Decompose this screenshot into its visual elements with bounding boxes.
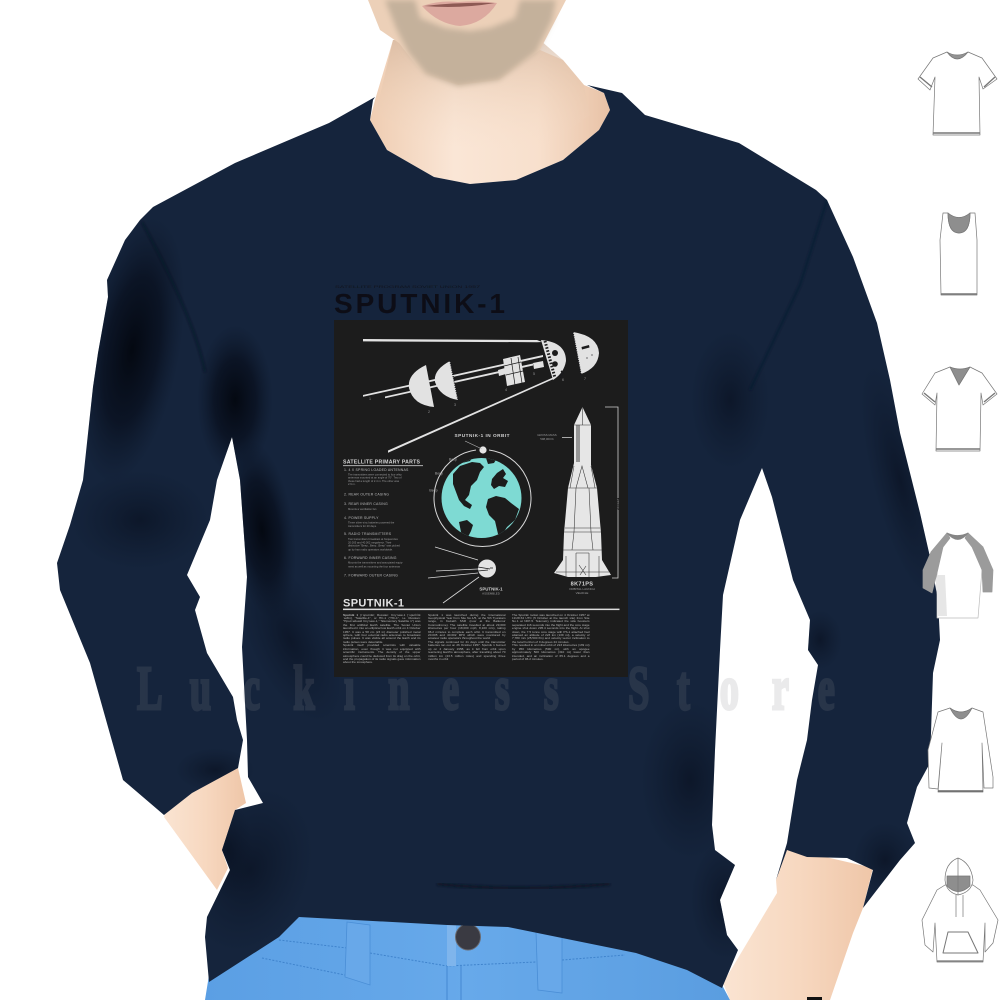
left forearm — [164, 768, 246, 890]
forward outer casing — [573, 332, 599, 374]
orbit heading: SPUTNIK-1 IN ORBIT — [454, 433, 510, 438]
belt loop left — [345, 922, 370, 985]
thumbnail: long sleeve tee — [928, 708, 993, 792]
watermark: Luckiness Store — [137, 655, 835, 723]
satellite primary parts list: The transmitters were connected to four whip — [348, 472, 402, 476]
part numbers: 1 — [369, 397, 371, 401]
assembled sputnik illustration — [428, 547, 503, 603]
beep labels: Beep — [449, 458, 457, 462]
satellite primary parts list: 3. REAR INNER CASING — [344, 502, 388, 506]
second heading: SPUTNIK-1: SPUTNIK-1 — [343, 597, 404, 609]
orbit diagram — [429, 433, 531, 547]
antennas — [363, 339, 553, 453]
right forearm and hand — [723, 848, 873, 1000]
thumbnail: raglan tee — [923, 533, 993, 618]
rocket 8K71PS diagram: VEHICLE — [576, 591, 588, 595]
thumbnail: tank top — [940, 213, 977, 295]
satellite primary parts list: 7. FORWARD OUTER CASING — [344, 574, 398, 578]
rear outer casing — [409, 365, 434, 407]
article column 1 — [343, 612, 420, 664]
earth globe — [442, 458, 522, 538]
satellite primary parts list: these had a length of 2.4 m. The other was — [348, 479, 400, 483]
gross mass label: GROSS MASS — [537, 433, 557, 437]
article column 3 — [512, 612, 590, 661]
part numbers — [369, 372, 586, 414]
article column 2: The signals continued for 21 days until the transmitter batteries ran out on 26 October 1957. Sputnik 1 burned up on 4 January 1958, as it fell from orbit upon reentering Earth's atmosphere, after travelling about 70 million km (43.5 million miles) and spending three months in orbit — [428, 640, 506, 661]
beep labels: Beep — [429, 488, 438, 492]
parts heading: SATELLITE PRIMARY PARTS — [343, 460, 421, 466]
satellite primary parts list: Three silver-zinc batteries powered the — [348, 520, 395, 524]
satellite primary parts list: 6. FORWARD INNER CASING — [344, 556, 397, 560]
satellite primary parts list: Mounts a ventilation fan — [348, 507, 377, 511]
article column 1: Sputnik itself provided scientists with valuable information, even though it was not equipped with scientific instruments. The density of the upper atmosphere could be deduced from its drag on the orbit, and the propagation of its radio signals gave information about the ionosphere. — [343, 643, 420, 664]
satellite primary parts list: Mounts the transmitters and associated equip- — [348, 561, 403, 565]
satellite exploded diagram — [363, 332, 599, 453]
rocket caption: 8K71PS — [571, 582, 593, 588]
satellite primary parts list: distinctive "Beep...Beep...Beep" was picked — [348, 544, 400, 548]
assembled caption: SPUTNIK-1 — [479, 586, 503, 592]
print artwork — [334, 285, 628, 677]
part numbers: 4 — [505, 388, 507, 392]
thumbnail: t-shirt — [918, 52, 997, 135]
rocket 8K71PS diagram — [537, 407, 620, 595]
satellite primary parts list: 1. 4 X SPRING LOADED ANTENNAS — [344, 468, 409, 472]
satellite primary parts list: antennas mounted at an angle of 70°. Two of — [348, 476, 402, 480]
assembled sputnik illustration: ASSEMBLED — [482, 591, 500, 595]
rocket body — [554, 407, 611, 577]
power supply block — [498, 355, 525, 386]
satellite primary parts list: 5. RADIO TRANSMITTERS — [344, 532, 392, 536]
rocket 8K71PS diagram: 598,000 lb — [540, 437, 554, 441]
radio transmitter block — [533, 361, 544, 369]
neck and lower face — [368, 0, 610, 184]
satellite primary parts list — [343, 460, 423, 578]
part numbers: 2 — [428, 410, 430, 414]
belt loop right — [536, 932, 562, 993]
print panel background — [334, 320, 628, 677]
height bracket — [605, 407, 618, 578]
article column 2: Sputnik 1 was launched during the International Geophysical Year from Site No.1/5, at the 5th Tyuratam range, in Kazakh SSR (now at the Baikonur Cosmodrome). The satellite travelled at about 29,000 kilometres per hour (18,000 mph; 8,100 m/s), taking 96.2 minutes to complete each orbit. It transmitted on 20.005 and 40.002 MHz which were monitored by amateur radio operators throughout the world. — [428, 612, 506, 640]
beep labels — [429, 458, 457, 492]
satellite primary parts list: Two transmitters broadcast at frequencies — [348, 537, 399, 541]
continents — [453, 458, 519, 541]
satellite primary parts list: transmitters for 20 days. — [348, 524, 377, 528]
satellite primary parts list: 2. REAR OUTER CASING — [344, 492, 389, 496]
forward inner casing — [541, 340, 566, 380]
part numbers: 5 — [533, 372, 535, 376]
article column 3: The Sputnik rocket was launched on 4 October 1957 at 19:28:34 UTC (5 October at the launch site) from Site No.1 at NIIP-5. Telemetry indicated the side boosters separated 116 seconds into the flight and the core stage engine shut down 295.4 seconds into the flight. At shut down, the 7.5 tonne core stage with PS-1 attached had attained an altitude of 223 km (139 mi), a velocity of 7,780 m/s (25,500 ft/s) and velocity vector inclination to the local horizon of 0 degrees 24 minutes. — [512, 612, 590, 644]
blue trousers — [205, 905, 730, 1000]
sputnik in orbit — [479, 446, 487, 454]
watermark: Luckiness Store: Luckiness — [137, 655, 559, 723]
rocket 8K71PS diagram: 50 FEET — [616, 498, 620, 510]
beep labels: Beep — [435, 472, 443, 476]
orbit ring — [434, 450, 531, 547]
thumbnail: hoodie — [922, 858, 998, 962]
article column 1: Sputnik 1 (/ˈspʊtnɪk/; Russian: Спутник-1 [ˈsputʲnʲɪk ˈadʲɪn], "Satellite-1", or ПС-1 ("ПС-1", i.e. Russian: "Простейший Спутник-1," "Elementary Satellite 1") was the first artificial Earth satellite. The Soviet Union launched it into an elliptical low Earth orbit on 4 October 1957. It was a 58 cm (23 in) diameter polished metal sphere, with four external radio antennas to broadcast radio pulses. It was visible all around the Earth and its radio pulses were detectable. — [343, 612, 420, 644]
thumbnails: style selector — [918, 52, 998, 962]
satellite primary parts list: 4. POWER SUPPLY — [344, 516, 379, 520]
title: SPUTNIK-1: SPUTNIK-1 — [334, 288, 505, 319]
rear inner casing — [435, 361, 458, 400]
part numbers: 6 — [562, 378, 564, 382]
satellite primary parts list: 20.005 and 40.002 megahertz. Their — [348, 540, 392, 544]
small caption above title: SATELLITE PROGRAM SOVIET UNION 1957 — [335, 285, 480, 289]
part numbers: 7 — [584, 377, 586, 381]
part numbers: 3 — [454, 403, 456, 407]
article column 3: This resulted in an initial orbit of 223 kilometres (139 mi) by 950 kilometres (590 mi), with an apogee approximately 500 kilometres (310 mi) lower than intended, and an inclination of 65.1 degrees and a period of 96.2 minutes. — [512, 643, 590, 661]
thumbnail: v-neck tee — [922, 367, 997, 451]
section rule — [343, 609, 620, 610]
satellite primary parts list: ment as well as mounting the four antennas — [348, 564, 401, 568]
watermark: Luckiness Store: Store — [628, 655, 835, 723]
article column 2 — [428, 612, 506, 661]
satellite primary parts list: 2.9 m. — [348, 482, 356, 486]
trouser button — [456, 924, 480, 950]
rocket 8K71PS diagram: ORBITAL LAUNCH — [569, 587, 595, 591]
satellite primary parts list: up by ham radio operators worldwide. — [348, 548, 393, 552]
